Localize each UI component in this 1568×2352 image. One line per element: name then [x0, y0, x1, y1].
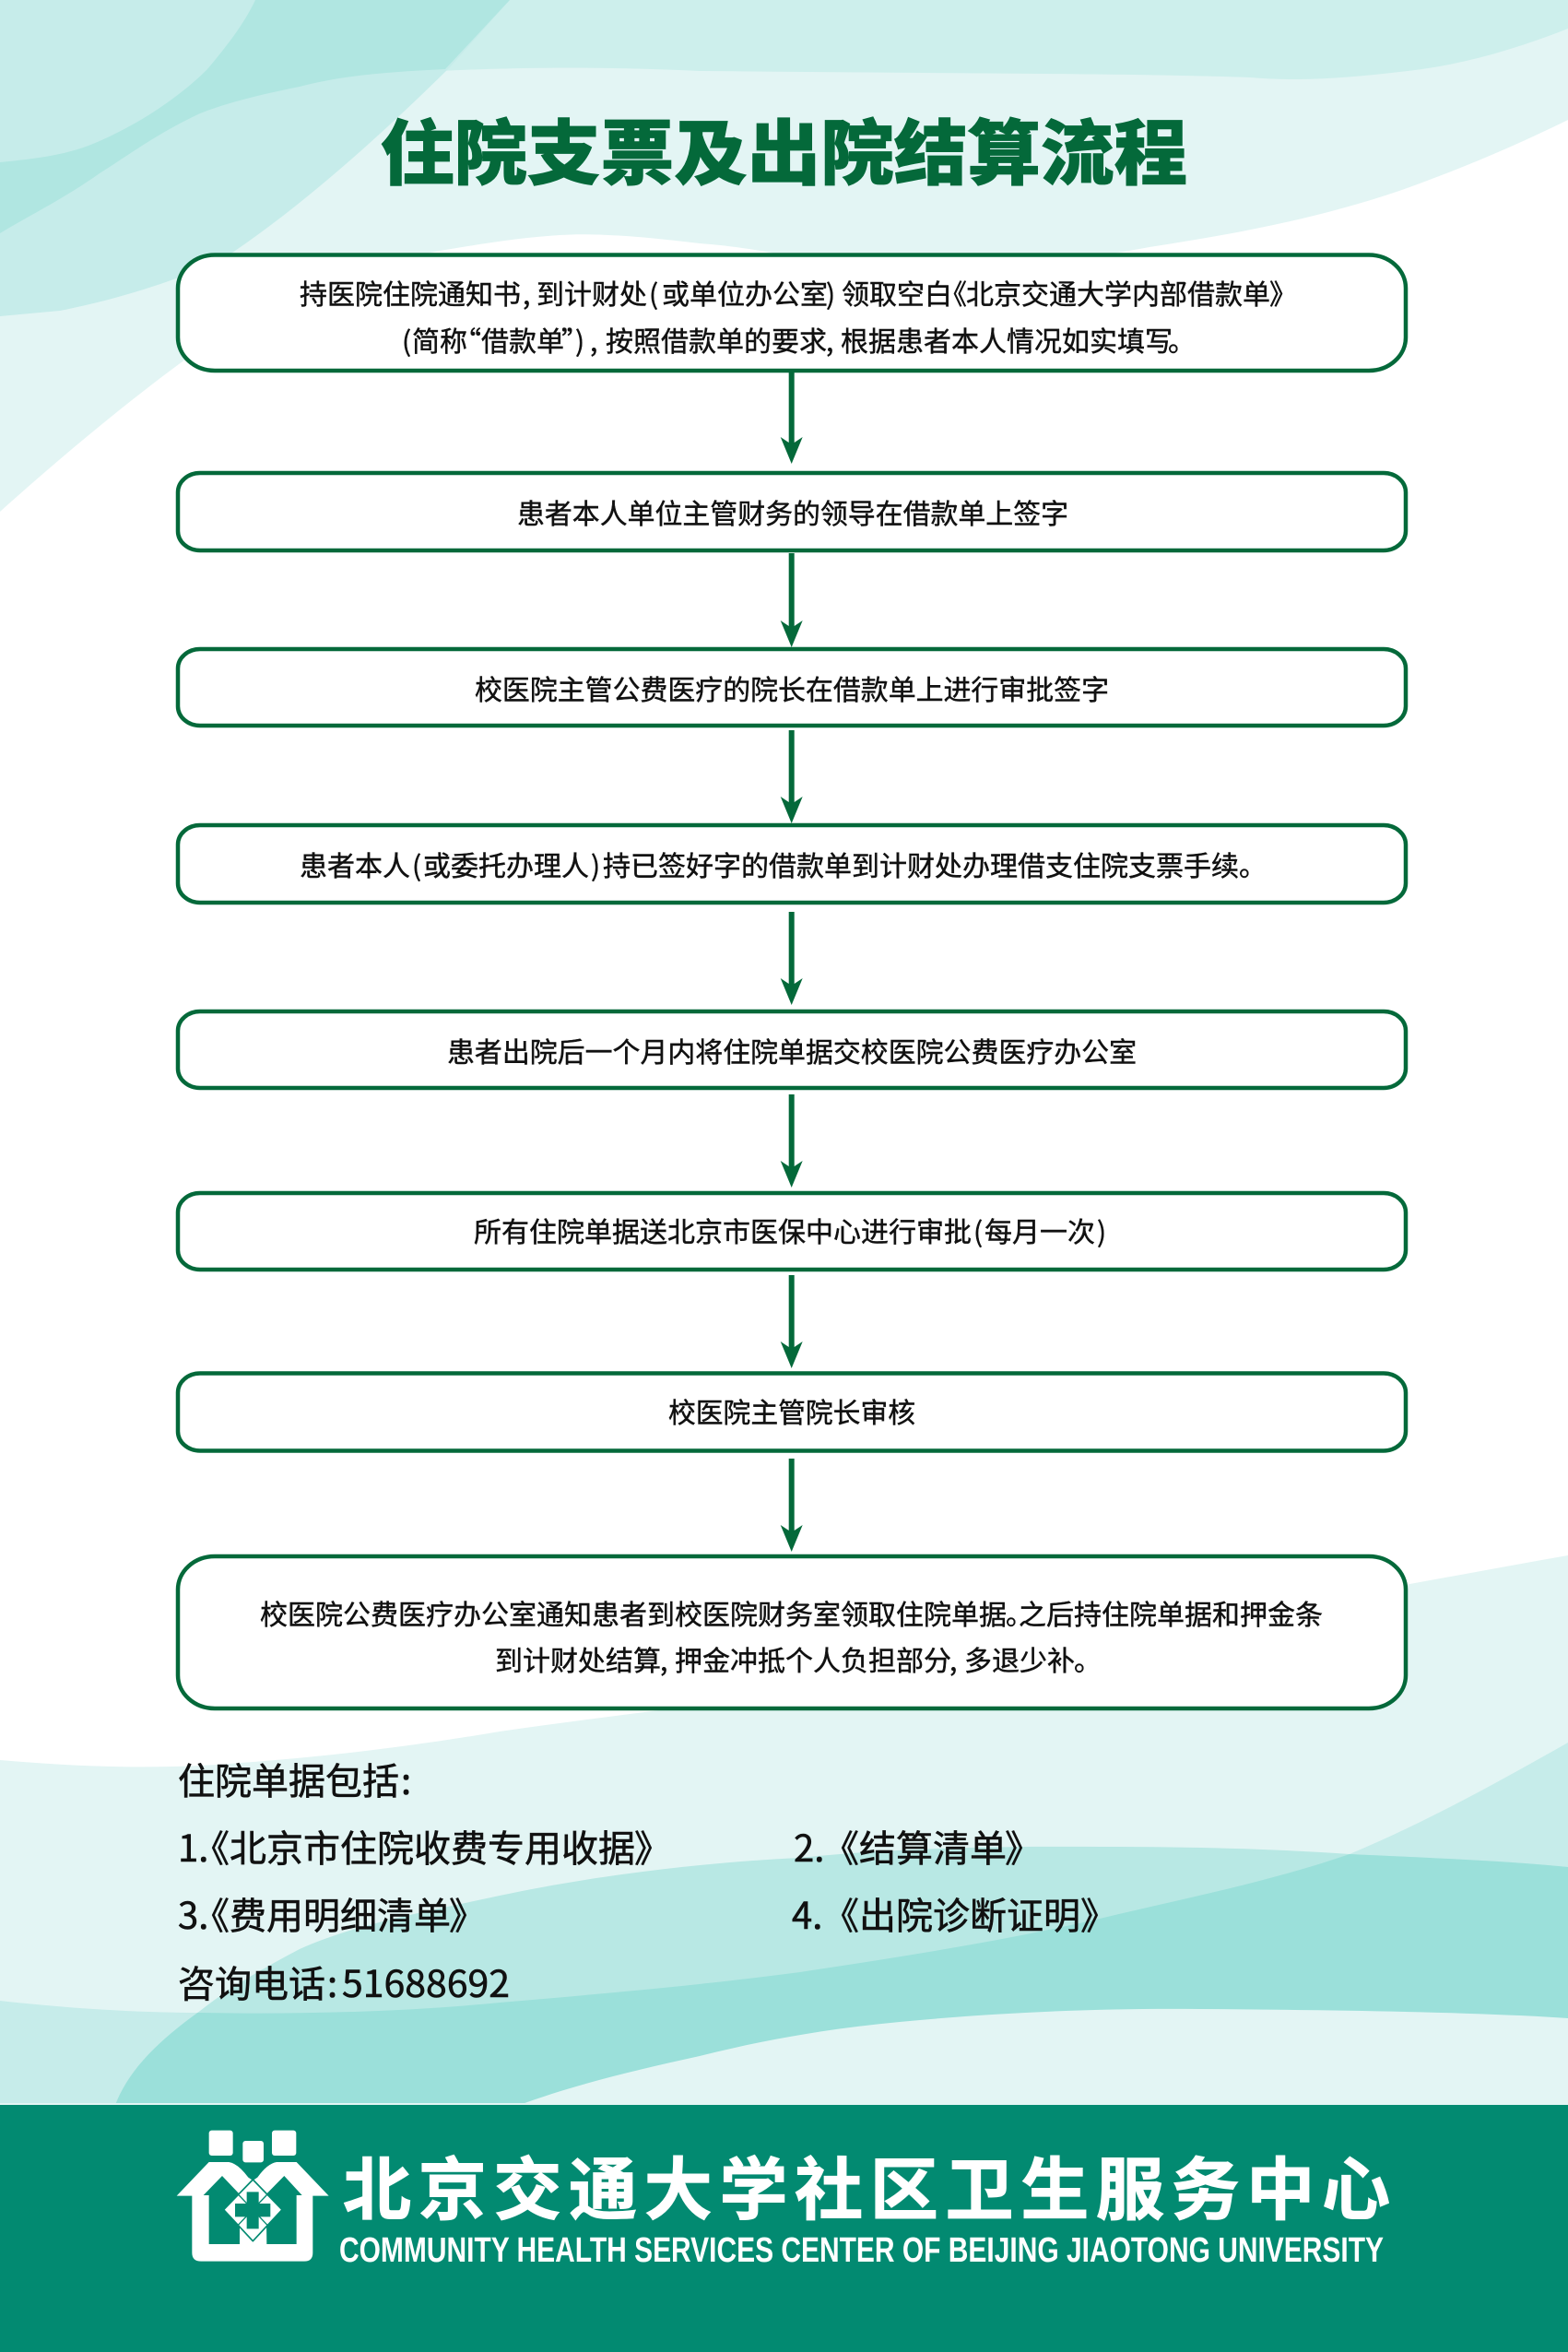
step 7 box: 校医院主管院长审核: [668, 1390, 915, 1431]
notes: hospital documents and phone: 北京市住院收费专用收据: [230, 1819, 635, 1873]
arrow 2: [781, 553, 803, 647]
step 2 box: 患者本人单位主管财务的领导在借款单上签字: [517, 491, 1068, 532]
notes: hospital documents and phone: 》: [449, 1886, 486, 1940]
icon: community health centre logo: [177, 2131, 329, 2262]
footer Chinese name: 北京交通大学社区卫生服务中心: [343, 2135, 1390, 2234]
footer band: [0, 2105, 1568, 2352]
step 4 box: 患者本人: [300, 844, 410, 884]
notes: hospital documents and phone: 1.: [178, 1819, 208, 1873]
step 5 box: 患者出院后一个月内将住院单据交校医院公费医疗办公室: [447, 1030, 1137, 1070]
step 1 box: ,: [826, 319, 833, 360]
step 8 box: [178, 1556, 1406, 1708]
step 4 box: 。: [1239, 844, 1267, 884]
notes: hospital documents and phone: 》: [1005, 1819, 1042, 1873]
step 1 box: 》: [1269, 272, 1297, 313]
notes: hospital documents and phone: 4.: [792, 1886, 822, 1940]
background: bottom waves: [0, 1555, 1568, 2105]
step 1 box: 《: [939, 272, 967, 313]
step 6 box: [178, 1193, 1406, 1270]
step 2 box: [178, 473, 1406, 550]
step 6 box: (: [973, 1210, 983, 1250]
step 4 box: (: [412, 844, 421, 884]
arrow 5: [781, 1094, 803, 1188]
step 6 box: 所有住院单据送北京市医保中心进行审批: [474, 1210, 972, 1250]
step 1 box: (: [649, 272, 658, 313]
step 4 box: 或委托办理人: [423, 844, 589, 884]
step 8 box: 。: [1006, 1592, 1033, 1633]
notes: hospital documents and phone: 《: [822, 1886, 859, 1940]
step 8 box: ,: [660, 1638, 667, 1679]
step 8 box: 校医院公费医疗办公室通知患者到校医院财务室领取住院单据: [260, 1592, 1007, 1633]
background: top waves: [0, 0, 1568, 512]
notes: hospital documents and phone: :: [327, 1955, 337, 2008]
notes: hospital documents and phone: 费用明细清单: [230, 1886, 451, 1940]
notes: hospital documents and phone: 《: [822, 1819, 859, 1873]
arrow 4: [781, 912, 803, 1005]
step 3 box: [178, 649, 1406, 726]
step 6 box: ): [1097, 1210, 1106, 1250]
step 1 box: 持医院住院通知书: [300, 272, 521, 313]
step 1 box: 按照借款单的要求: [606, 319, 827, 360]
step 8 box: ,: [949, 1638, 957, 1679]
step 3 box: 校医院主管公费医疗的院长在借款单上进行审批签字: [475, 668, 1109, 708]
step 1 box: ): [575, 319, 584, 360]
step 8 box: 。: [1074, 1638, 1102, 1679]
step 1 box: 根据患者本人情况如实填写: [841, 319, 1173, 360]
step 4 box: 持已签好字的借款单到计财处办理借支住院支票手续: [603, 844, 1239, 884]
step 1 box: 或单位办公室: [662, 272, 828, 313]
step 1 box: 到计财处: [536, 272, 647, 313]
step 1 box: ): [826, 272, 835, 313]
step 1 box: ”: [561, 319, 589, 360]
notes: hospital documents and phone: 3.: [178, 1886, 208, 1940]
notes: hospital documents and phone: :: [401, 1752, 411, 1805]
step 1 box: 简称: [412, 319, 467, 360]
step 1 box: ,: [523, 272, 530, 313]
step 8 box: 多退少补: [964, 1638, 1075, 1679]
notes: hospital documents and phone: 结算清单: [859, 1819, 1007, 1873]
step 8 box: 押金冲抵个人负担部分: [675, 1638, 951, 1679]
step 1 box: ,: [590, 319, 597, 360]
title: 住院支票及出院结算流程: [381, 98, 1187, 200]
step 4 box: [178, 825, 1406, 903]
step 8 box: 到计财处结算: [495, 1638, 661, 1679]
notes: hospital documents and phone: 《: [193, 1819, 230, 1873]
step 1 box: 北京交通大学内部借款单: [966, 272, 1270, 313]
arrow 6: [781, 1275, 803, 1368]
step 7 box: [178, 1374, 1406, 1451]
step 8 box: 之后持住院单据和押金条: [1019, 1592, 1323, 1633]
notes: hospital documents and phone: 》: [634, 1819, 671, 1873]
notes: hospital documents and phone: 住院单据包括: [178, 1752, 399, 1805]
notes: hospital documents and phone: 2.: [794, 1819, 824, 1873]
arrow 7: [781, 1459, 803, 1552]
notes: hospital documents and phone: 《: [193, 1886, 230, 1940]
step 1 box: “: [454, 319, 481, 360]
step 1 box: (: [402, 319, 411, 360]
notes: hospital documents and phone: 出院诊断证明: [859, 1886, 1080, 1940]
step 1 box: 领取空白: [842, 272, 952, 313]
step 4 box: ): [591, 844, 600, 884]
step 6 box: 每月一次: [984, 1210, 1095, 1250]
arrow 1: [781, 371, 803, 464]
step 5 box: [178, 1011, 1406, 1088]
notes: hospital documents and phone: 51688692: [342, 1955, 510, 2008]
arrow 3: [781, 730, 803, 823]
notes: hospital documents and phone: [178, 1752, 1117, 2008]
step 1 box: 借款单: [481, 319, 564, 360]
step 1 box: [178, 254, 1406, 371]
step 1 box: 。: [1168, 319, 1196, 360]
notes: hospital documents and phone: 》: [1080, 1886, 1117, 1940]
notes: hospital documents and phone: 咨询电话: [178, 1955, 325, 2008]
